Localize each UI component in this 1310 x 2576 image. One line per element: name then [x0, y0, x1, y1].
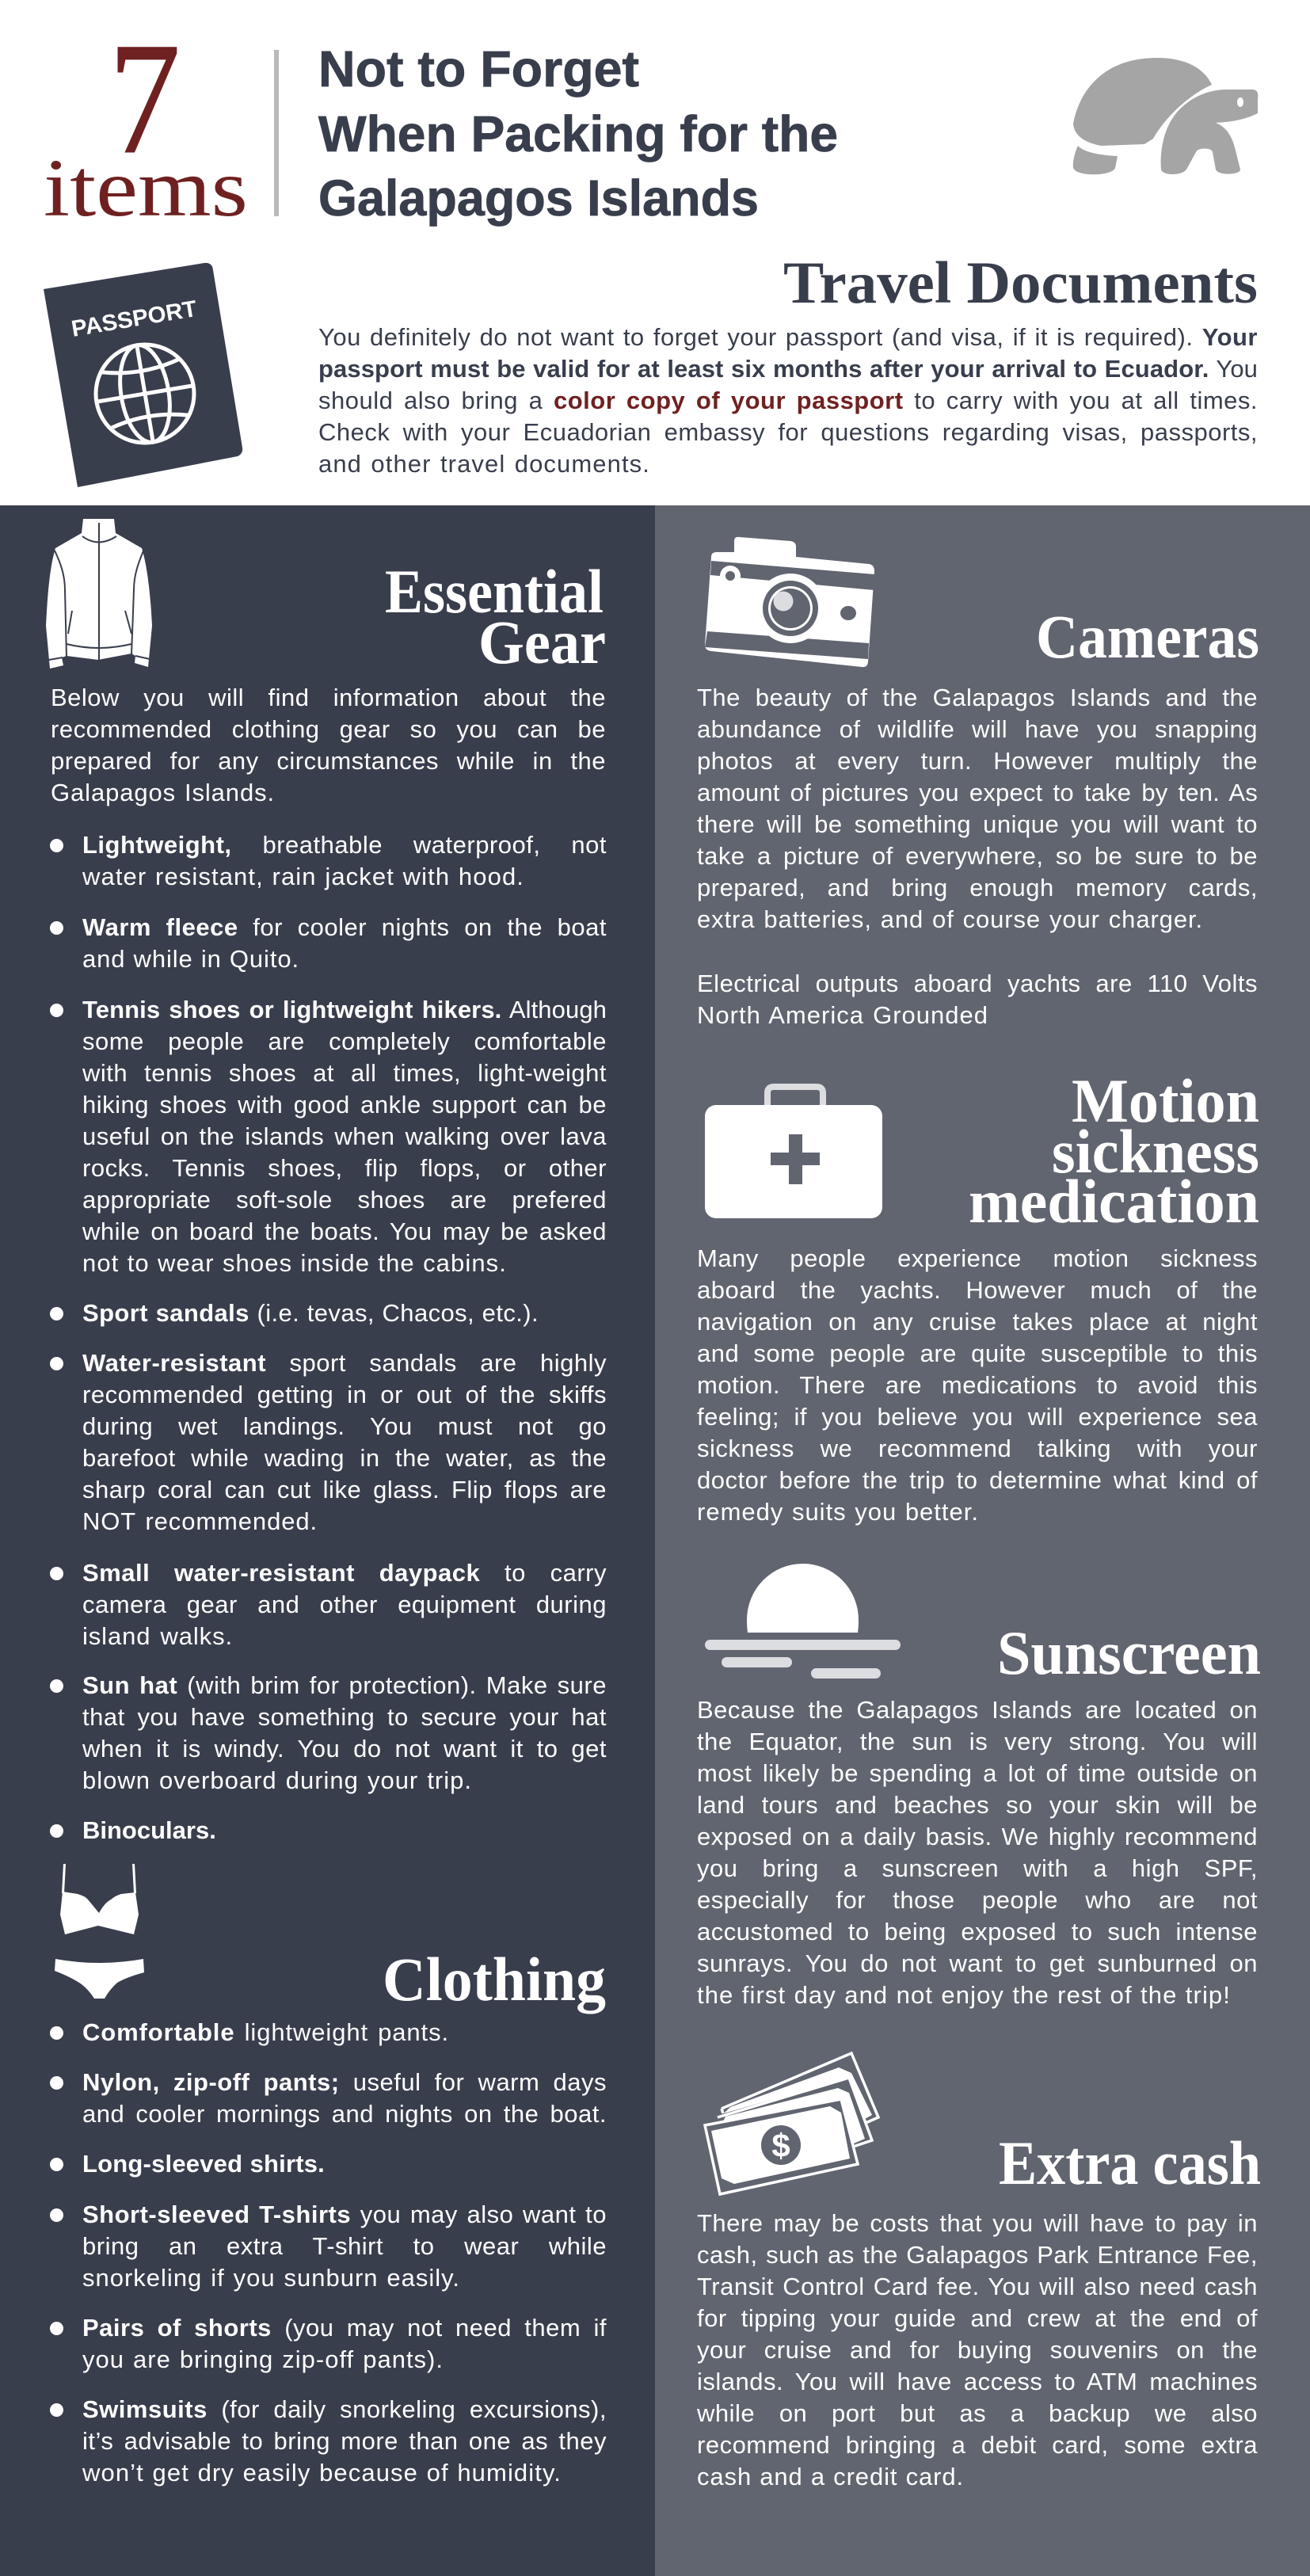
list item: short-sleeved t-shirts: Short-sleeved T-shirts you may also want to [82, 2201, 607, 2228]
text: motion sickness medication: navigation on any cruise takes place at night [697, 1308, 1258, 1336]
icon: passport [44, 263, 242, 487]
text: sunscreen: sunrays. You do not want to get sunburned on [697, 1949, 1258, 1977]
list item: warm fleece: Warm fleece for cooler nights on the boat [82, 913, 607, 941]
text: cameras: abundance of wildlife will have you snapping [697, 715, 1258, 743]
list item: sport sandals: Sport sandals (i.e. tevas, Chacos, etc.). [82, 1299, 539, 1327]
list item: binoculars: Binoculars. [82, 1816, 216, 1844]
list item: tennis shoes: not to wear shoes inside the cabins. [82, 1249, 507, 1277]
text: extra cash: cash and a credit card. [697, 2463, 964, 2490]
text: cameras: prepared, and bring enough memory cards, [697, 874, 1258, 901]
list item: short-sleeved t-shirts: snorkeling if you sunburn easily. [82, 2264, 460, 2292]
text: essential gear intro: Galapagos Islands. [51, 779, 275, 806]
list item: tennis shoes: some people are completely comfortable [82, 1027, 607, 1055]
list item: tennis shoes: while on board the boats. You may be asked [82, 1218, 607, 1245]
text: motion sickness medication [697, 1244, 1258, 1526]
text: motion sickness medication: feeling; if you believe you will experience sea [697, 1403, 1258, 1431]
text: cameras: extra batteries, and of course your charger. [697, 905, 1203, 933]
text: extra cash: Transit Control Card fee. You will also need cash [697, 2273, 1258, 2300]
list item: tennis shoes: Tennis shoes or lightweight hikers. Although [82, 996, 607, 1023]
text: motion sickness medication: sickness we recommend talking with your [697, 1435, 1258, 1462]
list item: sun hat [50, 1671, 607, 1794]
text: cameras [697, 684, 1258, 933]
list item: water-resistant sandals: barefoot while wading in the water, as the [82, 1444, 607, 1472]
list item: sun hat: blown overboard during your trip. [82, 1766, 472, 1794]
list item: swimsuits: won’t get dry easily because of humidity. [82, 2459, 562, 2486]
list item: tennis shoes [50, 996, 607, 1277]
list item: short-sleeved t-shirts [50, 2201, 607, 2292]
text: extra cash: your cruise and for buying souvenirs on the [697, 2336, 1258, 2364]
heading: essential gear: Essential [385, 557, 604, 626]
text: electrical outputs: Electrical outputs aboard yachts are 110 Volts [697, 970, 1258, 997]
list item: water-resistant sandals: sharp coral can cut like glass. Flip flops are [82, 1476, 607, 1503]
list item: long-sleeved shirts: Long-sleeved shirts. [82, 2150, 325, 2178]
word items: items [44, 143, 248, 234]
heading: sunscreen: Sunscreen [997, 1618, 1261, 1687]
list item: water-resistant sandals: Water-resistant sport sandals are highly [82, 1349, 607, 1377]
list item: water-resistant sandals [50, 1349, 607, 1535]
list item: nylon pants: Nylon, zip-off pants; useful for warm days [82, 2068, 607, 2096]
icon: tortoise [1073, 58, 1258, 174]
heading: motion sickness medication [969, 1066, 1259, 1236]
list item: water-resistant sandals: during wet landings. You must not go [82, 1412, 607, 1440]
text: cameras: amount of pictures you expect to take by ten. As [697, 779, 1258, 806]
list item: daypack: camera gear and other equipment during [82, 1591, 607, 1618]
list item: water-resistant sandals: recommended getting in or out of the skiffs [82, 1381, 607, 1408]
text: sunscreen: exposed on a daily basis. We highly recommend [697, 1823, 1258, 1850]
text: sunscreen: land tours and beaches so your skin will be [697, 1791, 1258, 1819]
list item: daypack [50, 1559, 607, 1650]
list item: shorts [50, 2314, 607, 2373]
icon: banknotes [705, 2053, 878, 2194]
list item: shorts: you are bringing zip-off pants). [82, 2345, 444, 2373]
list item: lightweight jacket: Lightweight, breathable waterproof, not [82, 831, 607, 859]
title: When Packing for the [318, 105, 838, 162]
list item: tennis shoes: rocks. Tennis shoes, flip flops, or other [82, 1154, 607, 1182]
text: cameras: photos at every turn. However multiply the [697, 747, 1258, 775]
heading: travel documents: Travel Documents [783, 250, 1258, 316]
text: travel documents [318, 323, 1258, 478]
text: sunscreen: the Equator, the sun is very strong. You will [697, 1728, 1258, 1755]
text: essential gear intro [51, 684, 606, 806]
list item: warm fleece [50, 913, 607, 973]
list item: tennis shoes: hiking shoes with good ankle support can be [82, 1091, 607, 1118]
heading: extra cash: Extra cash [999, 2128, 1261, 2197]
text: motion sickness medication: and some people are quite susceptible to this [697, 1339, 1258, 1367]
title divider [274, 50, 279, 216]
list item: swimsuits [50, 2395, 607, 2486]
panel: cameras, medication, sunscreen, cash background [655, 505, 1310, 2576]
title: Not to Forget [318, 40, 639, 97]
text: travel documents: and other travel documents. [318, 450, 650, 478]
text: extra cash: cash, such as the Galapagos Park Entrance Fee, [697, 2241, 1258, 2269]
title [318, 40, 838, 227]
text: cameras: take a picture of everywhere, so be sure to be [697, 842, 1258, 870]
text: extra cash: There may be costs that you will have to pay in [697, 2209, 1258, 2237]
list item: swimsuits: Swimsuits (for daily snorkeling excursions), [82, 2395, 607, 2423]
heading: cameras: Cameras [1036, 602, 1259, 671]
text: motion sickness medication: remedy suits you better. [697, 1498, 979, 1526]
heading: essential gear [385, 557, 606, 676]
text: sunscreen: especially for those people who are not [697, 1886, 1258, 1914]
text: sunscreen: you bring a sunscreen with a high SPF, [697, 1854, 1258, 1882]
icon: sunset [705, 1564, 901, 1679]
number seven: 7 [109, 10, 181, 187]
list item: nylon pants: and cooler mornings and nights on the boat. [82, 2100, 607, 2128]
list item: sun hat: Sun hat (with brim for protection). Make sure [82, 1671, 607, 1699]
title: Galapagos Islands [318, 170, 759, 227]
list item: sun hat: when it is windy. You do not want it to get [82, 1735, 607, 1762]
text: motion sickness medication: Many people experience motion sickness [697, 1244, 1258, 1272]
text: sunscreen: accustomed to being exposed to such intense [697, 1918, 1258, 1945]
text: extra cash: while on port but as a backup we also [697, 2399, 1258, 2427]
text: extra cash: recommend bringing a debit card, some extra [697, 2431, 1258, 2459]
text: motion sickness medication: motion. There are medications to avoid this [697, 1371, 1258, 1399]
list item: water-resistant sandals: NOT recommended. [82, 1507, 318, 1535]
text: travel documents: passport must be valid for at least six months after your arrival to Ecuador. You [318, 355, 1258, 383]
list item: daypack: Small water-resistant daypack to carry [82, 1559, 607, 1587]
list item: tennis shoes: appropriate soft-sole shoes are prefered [82, 1186, 607, 1214]
icon: camera [705, 537, 874, 667]
text: extra cash: islands. You will have access to ATM machines [697, 2368, 1258, 2395]
text: essential gear intro: prepared for any circumstances while in the [51, 747, 606, 775]
list item: lightweight jacket: water resistant, rain jacket with hood. [82, 863, 524, 890]
list item: warm fleece: and while in Quito. [82, 945, 299, 973]
list item: nylon pants [50, 2068, 607, 2128]
text: sunscreen [697, 1696, 1258, 2009]
text: motion sickness medication: doctor before the trip to determine what kind of [697, 1466, 1258, 1494]
list item: comfortable pants: Comfortable lightweight pants. [82, 2018, 449, 2046]
text: travel documents: Check with your Ecuadorian embassy for questions regarding visas, passports, [318, 418, 1258, 446]
icon: passport: PASSPORT [70, 296, 199, 342]
icon: jacket [46, 519, 152, 669]
text: extra cash: for tipping your guide and crew at the end of [697, 2304, 1258, 2332]
list item: swimsuits: it’s advisable to bring more than one as they [82, 2427, 607, 2455]
icon: bikini [55, 1864, 144, 1999]
text: travel documents: You definitely do not want to forget your passport (and visa, if it is required). Your [318, 323, 1258, 351]
list item: tennis shoes: useful on the islands when walking over lava [82, 1122, 607, 1150]
text: cameras: there will be something unique you will want to [697, 810, 1258, 838]
text: travel documents: should also bring a color copy of your passport to carry with you at all times. [318, 387, 1258, 414]
list item: shorts: Pairs of shorts (you may not need them if [82, 2314, 607, 2342]
text: sunscreen: the first day and not enjoy the rest of the trip! [697, 1981, 1231, 2009]
text: extra cash [697, 2209, 1258, 2490]
icon: first aid kit [705, 1087, 882, 1218]
list item: sun hat: that you have something to secure your hat [82, 1703, 607, 1731]
text: electrical outputs: North America Grounded [697, 1001, 988, 1029]
heading: motion sickness medication: medication [969, 1167, 1259, 1236]
list item: short-sleeved t-shirts: bring an extra T-shirt to wear while [82, 2232, 607, 2260]
heading: clothing: Clothing [383, 1945, 606, 2014]
list item: lightweight jacket [50, 831, 607, 890]
heading: motion sickness medication: Motion [1072, 1066, 1259, 1135]
text: electrical outputs [697, 970, 1258, 1029]
text: sunscreen: most likely be spending a lot of time outside on [697, 1759, 1258, 1787]
text: motion sickness medication: aboard the yachts. However much of the [697, 1276, 1258, 1304]
text: essential gear intro: Below you will find information about the [51, 684, 606, 711]
text: cameras: The beauty of the Galapagos Islands and the [697, 684, 1258, 711]
icon: banknotes: $ [771, 2127, 790, 2164]
list item: tennis shoes: with tennis shoes at all times, light-weight [82, 1059, 607, 1087]
text: sunscreen: Because the Galapagos Islands are located on [697, 1696, 1258, 1724]
list item: daypack: island walks. [82, 1622, 233, 1650]
heading: essential gear: Gear [478, 608, 606, 676]
text: essential gear intro: recommended clothing gear so you can be [51, 715, 606, 743]
panel: essential gear and clothing background [0, 505, 655, 2576]
heading: motion sickness medication: sickness [1052, 1117, 1259, 1186]
